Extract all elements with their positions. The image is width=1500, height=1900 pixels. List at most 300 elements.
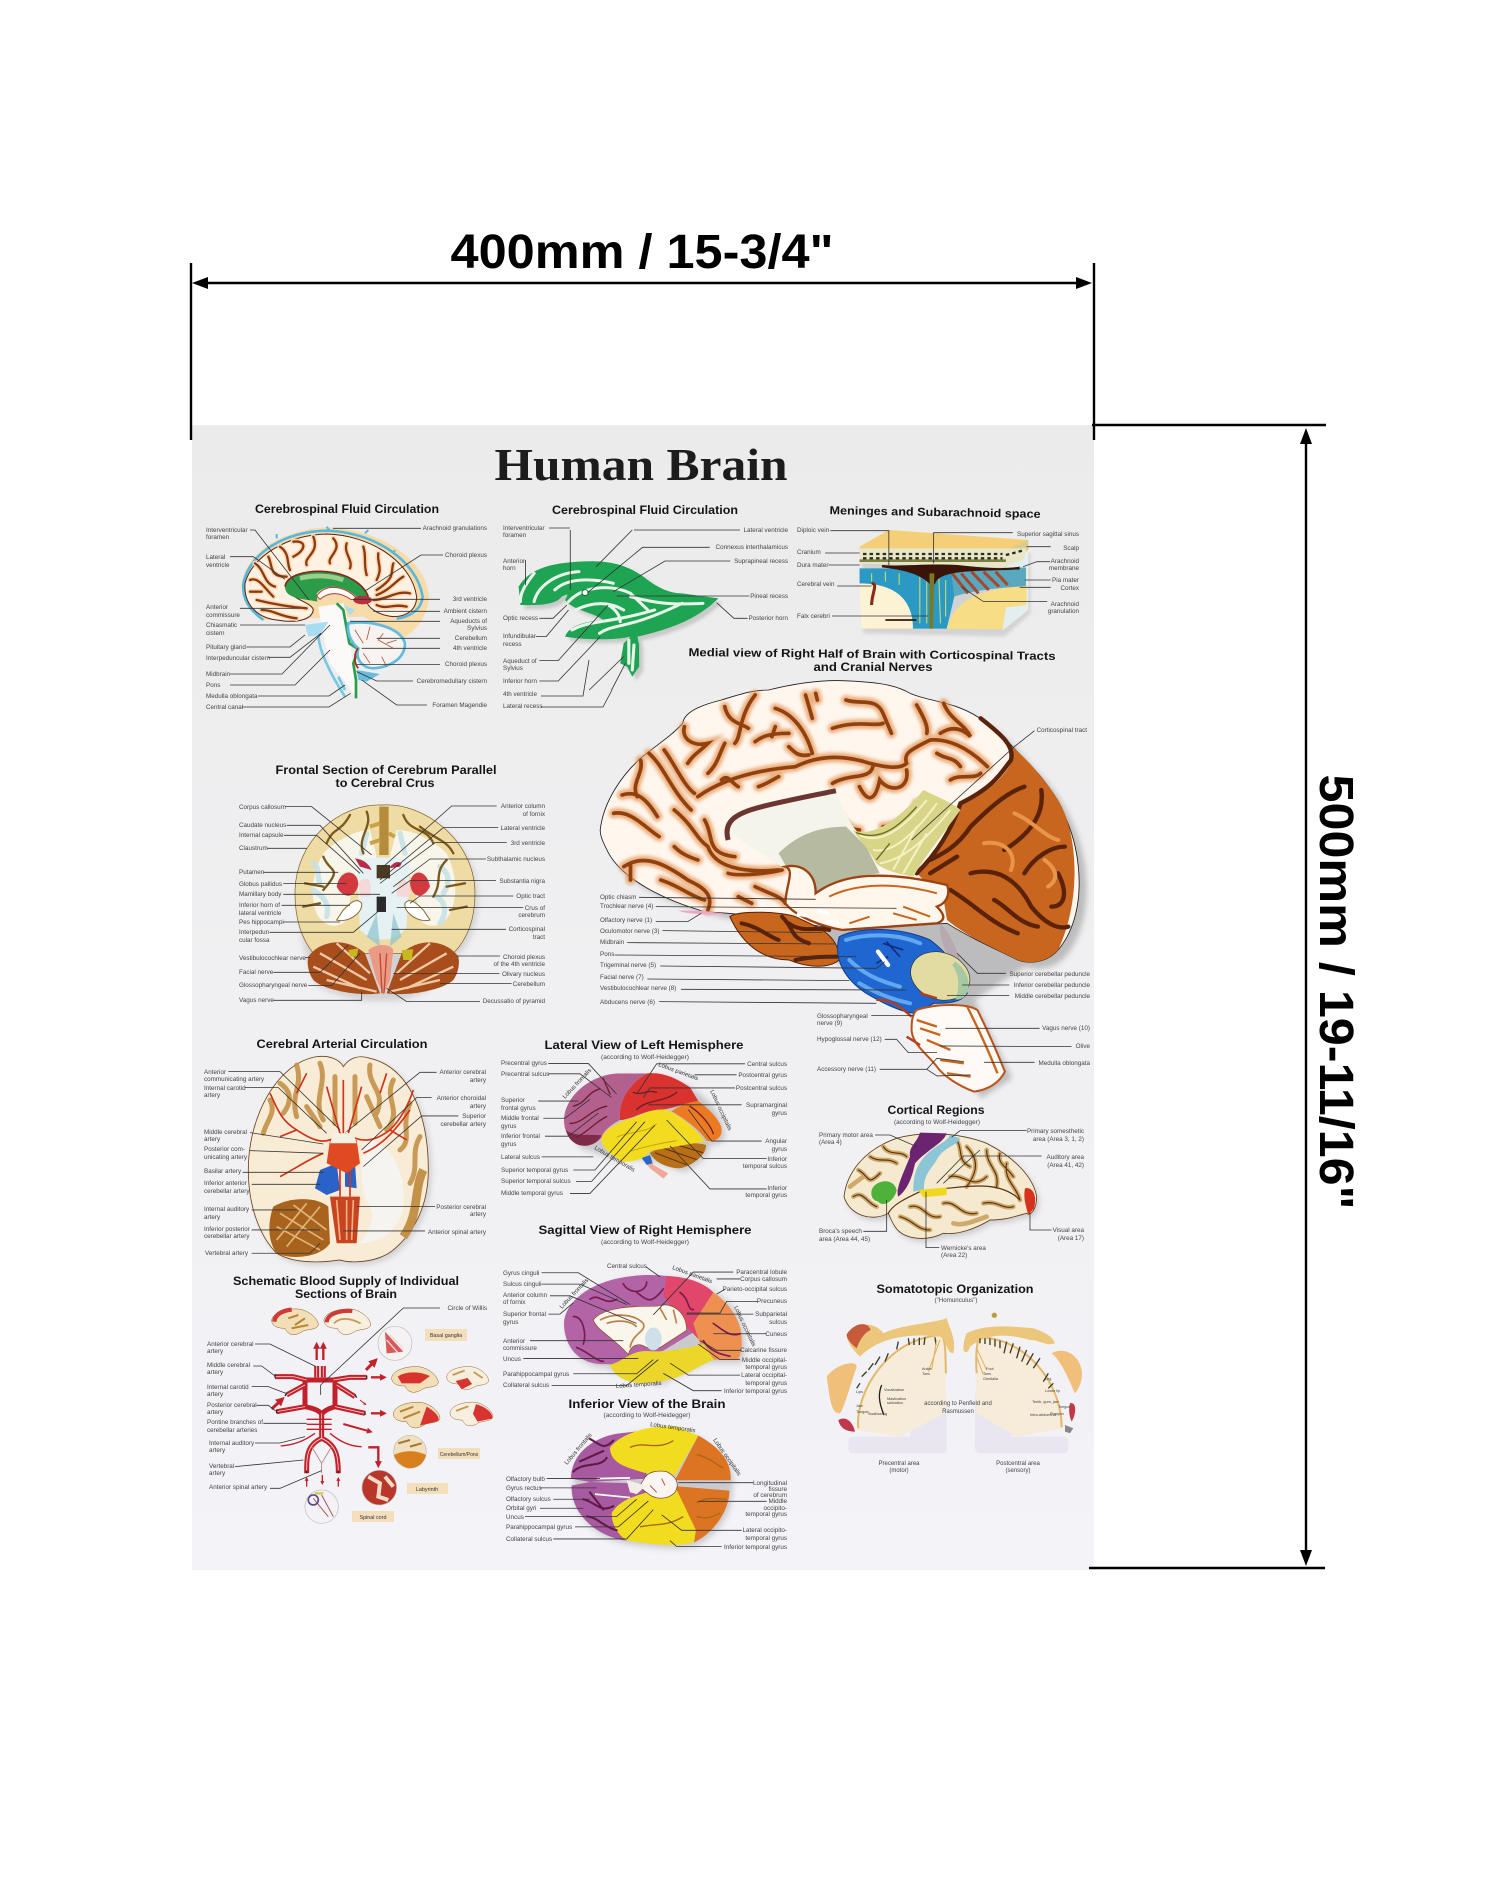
labels: right: Ambient cistern [444,608,487,615]
tag: labyrinth [407,1483,448,1494]
labels: left: frontal gyrus [501,1105,536,1112]
labels: left: Vestibulocochlear nerve [239,955,306,962]
labels: left: Facial nerve (7) [600,974,644,981]
labels: right: Postcentral gyrus [738,1072,787,1079]
labels: left: Vertebral artery [205,1250,249,1257]
tiny labels: sensory: Teeth, gum, jaw [1032,1400,1059,1404]
illustration: homunculus diagrams [827,1313,1082,1453]
artery tree [275,1366,367,1473]
labels: left: Optic recess [503,615,538,622]
labels: left: Vertebral [209,1463,234,1470]
labels: right [716,527,788,622]
labels [819,1132,986,1259]
labels: left [207,1341,268,1491]
labels: left: artery [207,1348,224,1355]
heading [276,765,496,790]
heading [233,1276,459,1301]
width dimension [191,226,1094,440]
occipital sulci [917,718,1068,933]
labels: right: Lateral ventricle [501,825,545,832]
labels: right: occipito- [764,1505,787,1512]
panel: cerebrospinal fluid circulation, ventricles [503,505,788,710]
labels: right: Posterior horn [748,615,788,622]
labels: right: Central sulcus [747,1061,787,1068]
labels: lower middle: nerve (9) [817,1020,842,1027]
labels: right: Pia mater [1052,577,1079,584]
lobe captions: Lobus temporalis [650,1422,696,1434]
labels: right: Scalp [1063,545,1079,552]
illustration: frontal section [263,805,523,1002]
labels: left: Sulcus cinguli [503,1281,542,1288]
leader lines [615,731,1072,1076]
labels: right: gyrus [772,1146,787,1153]
labels: left: Mamillary body [239,891,282,898]
drop shadow [608,687,1087,1098]
labels: left: Sylvius [503,665,523,672]
height dimension [1089,425,1362,1568]
labels: left: Olfactory bulb [506,1476,545,1483]
labels: left: Diploic vein [797,527,830,534]
labels: right: Crus of [525,905,545,912]
heading: Schematic Blood Supply of Individual [233,1276,459,1288]
labels: right: Primary somesthetic [1027,1128,1084,1135]
caption: precentral [878,1461,920,1474]
labels: right: Substantia nigra [499,878,545,885]
labels: right: Olivary nucleus [502,971,545,978]
labels: lower middle: Glossopharyngeal [817,1013,868,1020]
labels: right: Supramarginal [746,1102,787,1109]
labels: right: Superior cerebellar peduncle [1009,971,1090,978]
labels: right: Longitudinal [753,1480,787,1487]
labels: left: Dura mater [797,562,828,569]
illustration: green ventricles [519,530,749,690]
labels: right: Corpus callosum [740,1276,787,1283]
temporal lobe [730,912,839,966]
illustration: medial brain [600,681,1087,1098]
labels: right: Suprapineal recess [734,558,788,565]
labels: right: Arachnoid granulations [423,525,487,532]
labels: left: artery [209,1470,226,1477]
lobe captions [562,1062,732,1174]
labels: left: Aqueduct of [503,658,537,665]
labels: right [1027,1128,1084,1242]
labels: left: Posterior com- [204,1146,245,1153]
labels: right: Cerebellum [513,981,545,988]
labels: right: Middle occipital- [742,1357,787,1364]
tiny labels: sensory: Leg [1045,1377,1051,1381]
subheading: ("Homunculus") [934,1298,978,1304]
tiny labels: sensory: Toes [983,1372,991,1376]
labels: left [501,1060,571,1197]
panel: meninges and subarachnoid space [797,505,1080,637]
labels: left: cistern [206,630,225,637]
labels: right: Pineal recess [750,593,788,600]
labels: right: Inferior [767,1185,787,1192]
labels: left: Middle cerebral [204,1129,247,1136]
area: visual [1024,1188,1035,1215]
labels: lower middle: Hypoglossal nerve (12) [817,1036,882,1043]
labels: right: Inferior temporal gyrus [724,1544,787,1551]
heading: Frontal Section of Cerebrum Parallel [276,765,496,777]
area: primary motor [898,1133,947,1197]
labels: left: unicating artery [204,1154,248,1161]
heading: Inferior View of the Brain [568,1399,726,1411]
labels: right: cerebrum [518,912,545,919]
panel: inferior view of the brain [506,1399,787,1551]
cerebrum [600,681,1079,962]
labels: right: Choroid plexus [445,552,487,559]
labels: left: Olfactory nerve (1) [600,917,652,924]
labels: left [506,1476,572,1543]
labels: left [239,804,308,1004]
labels: left: Pituitary gland [206,644,246,651]
labels: left: Interventricular [206,527,248,534]
labels: left: Uncus [506,1514,524,1521]
panel: frontal section of cerebrum [239,765,546,1005]
area: Broca [871,1181,897,1204]
labels: left: gyrus [501,1123,516,1130]
labels: right: Middle [768,1498,787,1505]
labels: right: Anterior cerebral [439,1069,486,1076]
labels: left: Parahippocampal gyrus [506,1524,572,1531]
left body figures [847,1318,954,1357]
labels: left: Pes hippocampi [239,919,284,926]
labels: left: Oculomotor nerve (3) [600,928,660,935]
labels: left: cerebellar arteries [207,1427,257,1434]
caption: precentral: Precentral area [878,1461,920,1467]
labels: right: sulcus [769,1319,787,1326]
labels: (Area 22) [941,1252,967,1259]
labels: left: Glossopharyngeal nerve [239,982,308,989]
heading: Cerebrospinal Fluid Circulation [255,504,439,516]
centre caption: Rasmussen [942,1409,974,1415]
tiny labels: motor: salivation [887,1401,903,1405]
labels: right: 3rd ventricle [511,840,545,847]
labels: right: temporal gyrus [745,1511,787,1518]
purple frontal base [571,1430,647,1541]
tiny labels: sensory: Genitalia [983,1377,999,1381]
labels: left: Anterior cerebral [207,1341,254,1348]
tag: basal ganglia [425,1329,467,1341]
occipital region [917,737,1075,962]
labels: right: Postcentral sulcus [736,1085,787,1092]
labels: right [417,525,487,709]
labels: left: gyrus [503,1319,518,1326]
labels: right: Decussatio of pyramid [483,998,545,1005]
labels: left [600,894,676,1006]
heading: Lateral View of Left Hemisphere [544,1040,744,1052]
labels: left: Anterior [503,558,525,565]
labels: right: Choroid plexus [503,954,545,961]
lobe captions: Lobus temporalis [616,1381,662,1390]
labels: right: temporal sulcus [743,1163,787,1170]
thalamic arc [785,866,948,930]
tiny labels: sensory: Tongue [1058,1405,1070,1409]
labels: left: artery [204,1136,221,1143]
heading: Cortical Regions [888,1105,984,1117]
leader lines [541,528,740,707]
heading: Cerebrospinal Fluid Circulation [552,505,738,517]
labels: right: area (Area 3, 1, 2) [1033,1136,1084,1143]
heading: Sections of Brain [295,1289,397,1301]
labels: right: Optic tract [516,893,545,900]
leader lines [235,1308,440,1488]
labels: right: fissure [768,1486,787,1493]
heading: Sagittal View of Right Hemisphere [538,1225,752,1237]
labels: left: Inferior horn of [239,902,280,909]
labels: right: of fornix [523,811,546,818]
panel: schematic blood supply [207,1276,493,1523]
labels: right [1017,531,1080,615]
panel: cortical regions [819,1105,1084,1259]
heading: Medial view of Right Half of Brain with Corticospinal Tracts [688,647,1056,663]
labels: right: Superior sagittal sinus [1017,531,1079,538]
labels: left: Midbrain [206,671,231,678]
labels: left: Internal carotid [204,1085,246,1092]
labels: left: Corpus callosum [239,804,286,811]
labels: right: Anterior column [501,803,545,810]
tiny labels: motor: Toes [922,1372,930,1376]
labels: right: temporal gyrus [745,1535,787,1542]
centre caption [924,1401,992,1415]
caption: postcentral: (sensory) [1005,1468,1031,1474]
labels: right: Inferior cerebellar peduncle [1014,982,1090,989]
tiny labels: sensory: Intra-abdominal [1030,1413,1057,1417]
labels: left: Superior temporal sulcus [501,1178,571,1185]
heading [688,647,1056,674]
labels: right: Visual area [1053,1227,1084,1234]
labels: right: Anterior choroidal [437,1095,486,1102]
tiny labels: sensory: Foot [986,1367,995,1371]
labels: left: artery [204,1092,221,1099]
tiny labels: motor: Ankle [922,1367,932,1371]
labels: left: Superior frontal [503,1311,546,1318]
labels: left: cerebellar artery [204,1188,250,1195]
labels: left: Anterior spinal artery [209,1484,268,1491]
height dimension: 500mm / 19-11/16" [1309,774,1362,1210]
labels: right: 4th ventricle [453,645,487,652]
labels: left: Cranium [797,549,821,556]
pink olfactory [678,911,728,915]
caption: postcentral [996,1461,1041,1474]
labels: right [724,1480,787,1551]
subheading: (according to Wolf-Heidegger) [894,1120,980,1126]
caption: precentral: (motor) [889,1468,909,1474]
panel: somatotopic organization [827,1284,1082,1474]
labels: right [736,1061,787,1199]
labels: left: Putamen [239,869,265,876]
thumbnails: brain sections [272,1309,493,1428]
optic nerves [799,912,838,923]
tiny labels: motor [856,1367,932,1416]
subheading: (according to Wolf-Heidegger) [601,1055,689,1061]
labels: right: gyrus [772,1110,787,1117]
panel: lateral view of left hemisphere [501,1040,787,1199]
labels: left: artery [207,1409,224,1416]
area: primary somesthetic [913,1135,960,1192]
labels: left: Posterior cerebral [207,1402,257,1409]
tiny labels: sensory [983,1367,1070,1417]
tag: labyrinth: Labyrinth [416,1487,438,1493]
illustration: lateral brain with functional areas [844,1131,1052,1248]
tiny labels: sensory: Lower lip [1045,1389,1060,1393]
scale ticks [857,1337,1053,1388]
labels: left: horn [503,565,516,572]
tag: cerebellum/pons [438,1448,480,1459]
labels: left: Gyrus rectus [506,1485,542,1492]
labels: left: Middle temporal gyrus [501,1190,563,1197]
labels: right [428,1069,487,1236]
labels: lower middle: Accessory nerve (11) [817,1066,876,1073]
subheading: (according to Wolf-Heidegger) [604,1413,690,1419]
labels: right: Arachnoid [1051,558,1079,565]
labels: left: Abducens nerve (6) [600,999,655,1006]
labels: left: Internal carotid [207,1384,249,1391]
labels: left: artery [207,1391,224,1398]
labels: left: Caudate nucleus [239,822,286,829]
labels: left: artery [204,1214,221,1221]
red arrows [272,1346,383,1487]
labels: right: Corticospinal tract [1037,727,1087,734]
labels: left: of fornix [503,1299,526,1306]
labels: left: Anterior [204,1069,226,1076]
corticospinal bundle [853,790,960,877]
lobe captions: Lobus parietalis [671,1265,713,1285]
tiny labels: motor: Lips [856,1390,863,1394]
labels: left: Pontine branches of [207,1419,263,1426]
lobe captions: Lobus parietalis [657,1062,699,1082]
labels: left: Globus pallidus [239,881,282,888]
labels: left: artery [207,1369,224,1376]
tiny labels: sensory: Pharynx [1050,1412,1064,1416]
lobe captions: Lobus occipitalis [732,1305,756,1348]
labels: right: artery [470,1211,487,1218]
illustration: artery schematic [235,1308,493,1523]
panel: cerebrospinal fluid circulation, sagittal [206,504,487,711]
labels: right: Lateral ventricle [744,527,788,534]
labels: right: Precuneus [757,1298,787,1305]
peduncle oval [904,944,977,1008]
sulci glow [614,693,987,910]
labels: right: Choroid plexus [445,661,487,668]
labels: right: Calcarine fissure [740,1347,787,1354]
labels: left: foramen [503,532,527,539]
labels: right: Parieto-occipital sulcus [723,1286,787,1293]
centre caption: according to Penfield and [924,1401,992,1407]
label: circle of willis: Circle of Willis [447,1305,487,1312]
labels: left: commissure [206,612,240,619]
labels: left: Superior [501,1097,525,1104]
labels: left: Central canal [206,704,243,711]
labels: left: Parahippocampal gyrus [503,1371,569,1378]
illustration: cut-away tissue block [825,530,1051,637]
area: Wernicke [918,1187,947,1197]
labels: right: Cerebellum [455,635,487,642]
labels: left: Pons [206,682,220,689]
labels: right: Paracentral lobule [736,1269,787,1276]
labels: right: Inferior [767,1156,787,1163]
labels: left: Middle frontal [501,1115,539,1122]
labels: right: Arachnoid [1051,601,1079,608]
labels: right: membrane [1049,565,1079,572]
labels: right: Sylvius [467,625,487,632]
tag: basal ganglia: Basal ganglia [430,1333,462,1339]
heading: Somatotopic Organization [876,1284,1034,1296]
labels: right: cerebellar artery [440,1121,487,1128]
illustration: coloured lobes [525,1426,767,1548]
labels: (Area 4) [819,1139,842,1146]
labels: right: Cerebromedullary cistern [417,678,487,685]
lobe captions: Lobus occipitalis [708,1089,732,1132]
tag: spinal cord [352,1511,394,1522]
labels: left: Falx cerebri [797,613,830,620]
labels: left: Internal auditory [209,1440,255,1447]
labels: left [503,525,545,710]
labels: left: Facial nerve [239,969,274,976]
labels: left: Trochlear nerve (4) [600,903,653,910]
labels: left: Vagus nerve [239,997,274,1004]
labels: left: recess [503,641,522,648]
labels: left: Middle cerebral [207,1362,250,1369]
labels: left: Internal capsule [239,832,284,839]
labels: right: Corticospinal [509,926,545,933]
leader lines [863,1131,1052,1248]
labels: left: Basilar artery [204,1168,242,1175]
labels: left: cular fossa [239,937,270,944]
labels: right: Auditory area [1047,1154,1084,1161]
labels: right: temporal gyrus [745,1364,787,1371]
labels: left: Inferior anterior [204,1180,247,1187]
subheading: (according to Wolf-Heidegger) [601,1240,689,1246]
labels: right: (Area 17) [1058,1235,1084,1242]
labels: right: Inferior temporal gyrus [724,1388,787,1395]
lobe captions: Lobus occipitalis [711,1438,742,1477]
labels: right: Connexus interthalamicus [716,544,788,551]
left motor cortex [856,1333,946,1437]
labels: left: foramen [206,534,230,541]
labels: left: Lateral recess [503,703,543,710]
labels: left: Interpeduncular cistern [206,655,271,662]
labels: left: Chiasmatic [206,622,237,629]
labels: right: granulation [1048,608,1079,615]
heading: Cerebral Arterial Circulation [256,1039,428,1051]
labels: left: Pons [600,951,614,958]
labels: right: Cortex [1060,585,1080,592]
labels: right: Olive [1076,1043,1090,1050]
labels: right: Middle cerebellar peduncle [1015,993,1090,1000]
labels: left: gyrus [501,1141,516,1148]
labels: left: Inferior frontal [501,1133,540,1140]
labels: right: 3rd ventricle [453,596,487,603]
labels: right: Subparietal [755,1311,787,1318]
sulci [614,693,987,910]
labels: left: Uncus [503,1356,521,1363]
labels: left: Anterior column [503,1292,548,1299]
labels: right: of the 4th ventricle [494,961,545,968]
poster sheet [192,425,1094,1570]
labels: left: Trigeminal nerve (5) [600,962,656,969]
labels: right [1009,727,1090,1067]
labels: right: artery [470,1077,487,1084]
labels: left: 4th ventricle [503,691,537,698]
labels: left [503,1263,647,1389]
labels: right: Superior [462,1113,486,1120]
labels: left: lateral ventricle [239,910,282,917]
labels: left: Medulla oblongata [206,693,258,700]
lobe captions: Lobus temporalis [593,1146,636,1174]
labels: right: Posterior cerebral [436,1204,486,1211]
labels: right [723,1269,787,1395]
